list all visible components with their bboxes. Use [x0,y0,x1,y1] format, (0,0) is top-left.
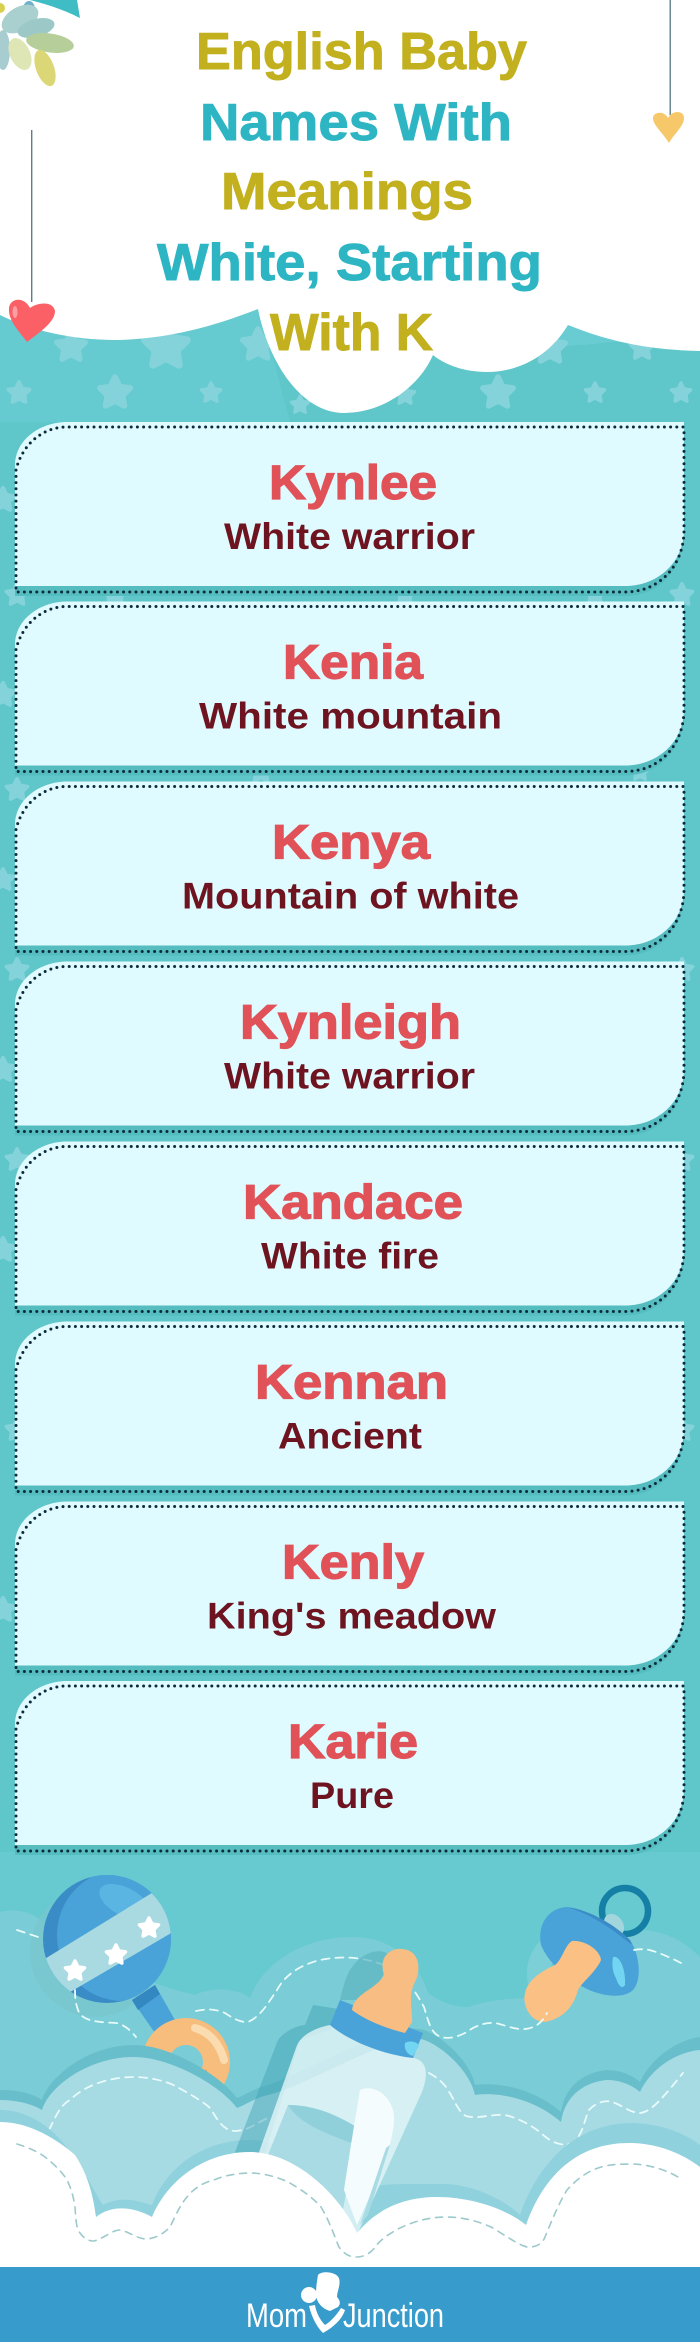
decoration: watercolor leaves [0,0,75,89]
pacifier [524,1888,648,2022]
title [157,23,542,362]
title: Meanings [221,163,473,221]
white dashed stitching: upper [17,1930,681,2038]
decoration: teal pennant [30,0,80,18]
card: Kenya [15,782,684,956]
card: Karie: Pure [310,1775,394,1816]
card: Kynlee [15,422,684,596]
star pattern [0,325,692,1620]
card: Kynleigh: Kynleigh [240,996,461,1050]
cloud layer: medium blue band [0,2110,700,2260]
card: Karie [15,1681,684,1855]
title: Names With [200,94,512,152]
card: Kenia [15,602,684,776]
card: Kennan [15,1322,684,1496]
card: Kandace: White fire [261,1236,439,1276]
MomJunction logo [246,2272,444,2335]
white dashed stitching: lower [49,2073,683,2144]
title: With K [270,304,433,362]
baby bottle [235,1949,426,2240]
card: Kenya: Kenya [272,816,430,870]
card: Kandace: Kandace [243,1176,463,1230]
card: Kenly [15,1502,684,1676]
card: Kenia: White mountain [199,696,502,736]
card: Kynleigh [15,962,684,1136]
MomJunction logo: Junction [343,2297,444,2335]
card: Kandace [15,1142,684,1316]
header white cloud [0,0,700,413]
decoration: yellow heart on string [653,0,684,143]
white foreground clouds [0,2122,700,2270]
card: Kynlee: Kynlee [269,457,437,510]
card: Kynlee: White warrior [224,516,475,557]
rattle [30,1869,224,2094]
cloud layer: dark teal band [0,2029,700,2230]
title: English Baby [196,23,527,81]
card: Kynleigh: White warrior [224,1056,475,1096]
footer bar [0,2267,700,2342]
card: Kenly: King's meadow [207,1596,496,1636]
grey dashed stitching on clouds [17,2144,681,2257]
cloud layer: pale blue [0,2039,700,2250]
MomJunction logo: Mom [246,2297,307,2335]
card: Kenia: Kenia [283,636,423,690]
card: Kenly: Kenly [282,1536,424,1590]
decoration: red heart on string [9,130,55,342]
card: Kennan: Kennan [255,1356,448,1410]
title: White, Starting [157,234,542,292]
background hills: light teal layer [0,1911,700,2150]
card: Kennan: Ancient [278,1416,422,1456]
card: Kenya: Mountain of white [182,876,519,916]
card: Karie: Karie [288,1716,418,1769]
